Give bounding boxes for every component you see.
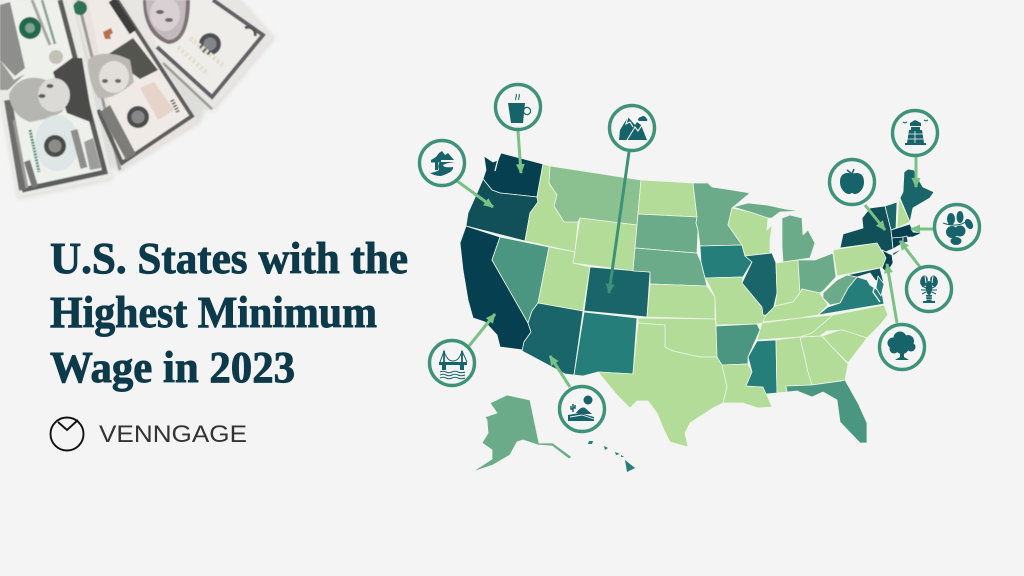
state: Ohio — [798, 253, 836, 293]
arrow: Washington — [518, 131, 521, 173]
state: Rhode Island — [903, 236, 908, 243]
state: Iowa — [700, 245, 752, 278]
state: Connecticut — [892, 237, 903, 249]
state: Virginia — [818, 277, 884, 315]
state: West Virginia — [823, 275, 857, 305]
bill: right — [120, 0, 273, 109]
arrow: Maine — [914, 157, 918, 187]
icon: desert — [560, 386, 604, 432]
state: Georgia — [800, 336, 848, 385]
title: Highest Minimum — [50, 288, 377, 337]
state: Arkansas — [716, 324, 760, 365]
state: Mississippi — [746, 340, 777, 394]
state: Idaho — [525, 164, 578, 252]
arrow: Arizona — [550, 356, 570, 387]
arrow: California — [469, 314, 495, 346]
state: California — [460, 226, 531, 350]
state: New Jersey — [882, 250, 893, 273]
state: Minnesota — [693, 183, 750, 246]
state: New York — [840, 206, 903, 256]
icon: tree — [880, 324, 924, 370]
state: Delmarva coast — [876, 276, 884, 296]
arrow: Colorado — [609, 152, 629, 293]
state: Louisiana — [722, 364, 772, 408]
title: U.S. States with the — [50, 234, 408, 283]
icon: lighthouse — [892, 110, 938, 156]
title — [50, 234, 408, 392]
state: Oregon — [466, 179, 538, 241]
state: New Hampshire — [897, 198, 910, 228]
state: North Carolina — [800, 305, 888, 338]
state: Wyoming — [573, 218, 637, 271]
title: Wage in 2023 — [50, 343, 295, 392]
arrow: Massachusetts — [911, 228, 933, 230]
state: Illinois — [742, 253, 777, 315]
state: Nevada — [492, 237, 549, 323]
state: New Mexico — [574, 312, 637, 376]
state: Florida — [786, 380, 867, 443]
state: Kentucky — [763, 289, 828, 322]
state: Kansas — [647, 284, 715, 319]
state: Maine — [900, 169, 934, 222]
state: Arizona — [522, 303, 583, 375]
icon: apple — [830, 160, 874, 204]
arrow: Oregon — [457, 181, 493, 207]
state: Vermont — [885, 202, 897, 230]
state: Montana — [549, 166, 641, 225]
waterways: Puget Sound and Chesapeake Bay — [495, 156, 880, 302]
logo wordmark: VENNGAGE — [99, 421, 247, 448]
state: Alaska — [472, 395, 572, 472]
arrow: Rhode Island — [900, 241, 920, 267]
state: Oklahoma — [638, 318, 717, 357]
state: Colorado — [584, 267, 650, 317]
state: Alabama — [776, 337, 812, 393]
map: US states by minimum wage — [460, 153, 934, 472]
icon: river — [420, 140, 464, 186]
state: Pennsylvania — [833, 243, 887, 276]
arrows — [457, 131, 933, 387]
state: Nebraska — [633, 248, 707, 286]
bill: left — [0, 0, 112, 197]
logo mark — [50, 418, 84, 450]
state: Indiana — [775, 260, 800, 306]
bill: middle — [72, 0, 199, 170]
photo: dollar bills — [0, 0, 275, 199]
icon: beach plums — [934, 204, 980, 250]
state: Maryland — [847, 268, 884, 284]
state: Wisconsin — [728, 208, 772, 256]
state: Michigan — [733, 203, 815, 262]
state: Massachusetts — [891, 224, 922, 238]
arrow: New York — [865, 205, 885, 230]
icon: bridge — [430, 340, 474, 386]
state: North Dakota — [638, 180, 697, 217]
icon: coffee cup — [496, 84, 540, 130]
state: Missouri — [705, 277, 766, 325]
state: South Dakota — [635, 214, 698, 253]
icon: mountains — [610, 106, 654, 150]
arrow: Maryland — [887, 264, 897, 323]
icon: lobster — [906, 266, 952, 312]
state: Utah — [538, 247, 590, 311]
state: Hawaii — [588, 441, 635, 472]
state: Tennessee — [757, 315, 833, 340]
state: Texas — [598, 323, 727, 447]
state: Washington — [483, 153, 543, 197]
state: South Carolina — [822, 329, 867, 363]
logo: Venngage — [50, 418, 247, 450]
